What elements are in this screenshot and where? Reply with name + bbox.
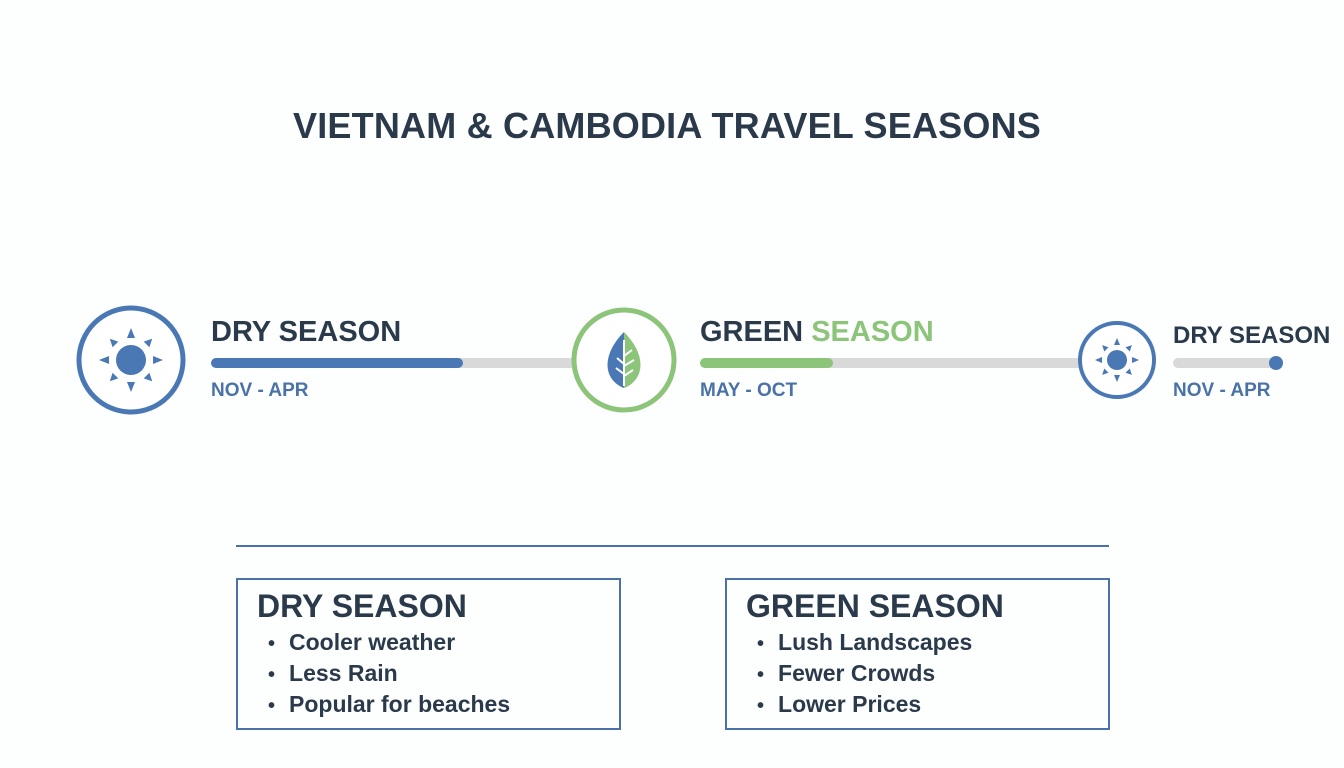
- panel: green season: Lower Prices: [778, 691, 921, 717]
- icon: sun large: [79, 308, 183, 412]
- label: green season: MAY - OCT: [700, 380, 797, 401]
- timeline: [76, 306, 1283, 414]
- label: dry season: DRY SEASON: [211, 316, 401, 348]
- panel: dry season: Popular for beaches: [289, 691, 510, 717]
- panel: dry season: Cooler weather: [289, 629, 455, 655]
- label: dry season end: NOV - APR: [1173, 380, 1270, 401]
- label: green season: [700, 316, 934, 401]
- track: green season: [700, 358, 1085, 368]
- panel: dry season: DRY SEASON: [257, 588, 467, 624]
- track: dry season: [211, 358, 576, 368]
- track: dry season end: [1173, 356, 1283, 370]
- label: green season: GREEN SEASON: [700, 316, 934, 348]
- label: dry season end: [1173, 322, 1330, 401]
- title: VIETNAM & CAMBODIA TRAVEL SEASONS: [293, 105, 1041, 146]
- panel: dry season: [236, 578, 621, 730]
- panel: green season: GREEN SEASON: [746, 588, 1004, 624]
- divider: [236, 545, 1109, 547]
- icon: sun small: [1080, 323, 1154, 397]
- label: dry season end: DRY SEASON: [1173, 322, 1330, 349]
- label: dry season: [211, 316, 401, 401]
- panel: green season: Fewer Crowds: [778, 660, 935, 686]
- panel: green season: Lush Landscapes: [778, 629, 972, 655]
- panel: dry season: Less Rain: [289, 660, 398, 686]
- icon: leaf: [574, 310, 674, 410]
- panel: green season: [725, 578, 1110, 730]
- label: dry season: NOV - APR: [211, 380, 308, 401]
